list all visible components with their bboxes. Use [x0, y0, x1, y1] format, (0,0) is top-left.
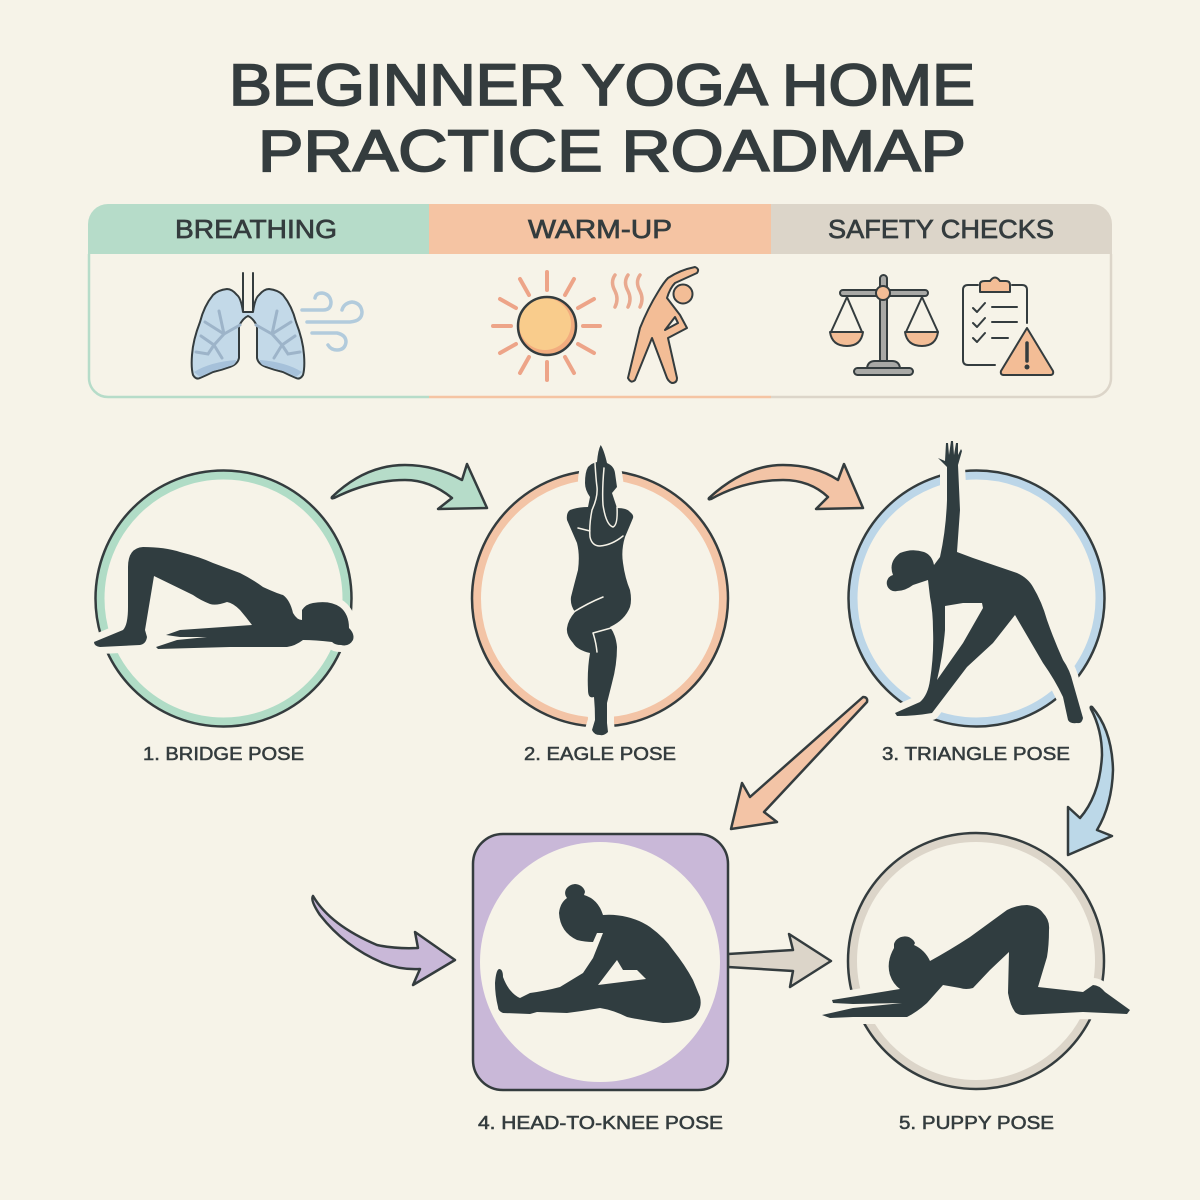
silhouette: bridge pose: [94, 547, 354, 649]
ring: bridge: [96, 470, 352, 726]
heading: breathing: BREATHING: [175, 216, 337, 244]
label: bridge pose: 1. BRIDGE POSE: [143, 743, 304, 764]
ring: triangle: [848, 470, 1104, 726]
arrow: triangle to puppy: [1068, 707, 1113, 855]
panel: 1 bridge pose: [94, 470, 354, 764]
arrow: bridge to eagle: [332, 464, 487, 509]
panel: 4 head-to-knee pose: [473, 834, 728, 1133]
icon: lungs: [192, 273, 304, 379]
arrow: into head-to-knee: [312, 896, 455, 985]
label: head-to-knee pose: 4. HEAD-TO-KNEE POSE: [478, 1112, 723, 1133]
icon: heat waves: [612, 275, 642, 307]
icon: balance scales: [830, 275, 938, 375]
label: eagle pose: 2. EAGLE POSE: [524, 743, 676, 764]
title: BEGINNER YOGA HOME: [229, 53, 975, 118]
icon: safety checklist: [963, 278, 1053, 375]
arrow: eagle to triangle: [709, 464, 863, 509]
title: [229, 53, 975, 184]
label: triangle pose: 3. TRIANGLE POSE: [882, 743, 1070, 764]
panel: 3 triangle pose: [848, 441, 1104, 764]
panel: 2 eagle pose: [472, 445, 728, 764]
ring: puppy: [848, 833, 1104, 1089]
silhouette: eagle pose: [567, 445, 633, 735]
silhouette: puppy pose: [822, 905, 1130, 1018]
label: puppy pose: 5. PUPPY POSE: [899, 1112, 1054, 1133]
heading: warm-up: WARM-UP: [528, 216, 672, 244]
pose contour lines: [572, 463, 623, 652]
title: PRACTICE ROADMAP: [258, 119, 966, 184]
silhouette: head-to-knee pose: [495, 884, 701, 1023]
frame: rounded square: [473, 834, 728, 1090]
icon: breath wind: [302, 293, 362, 350]
arrow: triangle to head-to-knee: [731, 697, 867, 829]
panel: 5 puppy pose: [822, 833, 1130, 1133]
panel: preparation overview: [88, 204, 1112, 397]
heading: safety checks: SAFETY CHECKS: [828, 216, 1054, 244]
silhouette: triangle pose: [887, 441, 1083, 723]
inner circle: [480, 842, 720, 1082]
icon: sun: [493, 272, 600, 380]
arrow: head-to-knee to puppy: [728, 934, 831, 987]
icon: side-stretch figure: [628, 267, 698, 383]
ring: eagle: [472, 470, 728, 726]
